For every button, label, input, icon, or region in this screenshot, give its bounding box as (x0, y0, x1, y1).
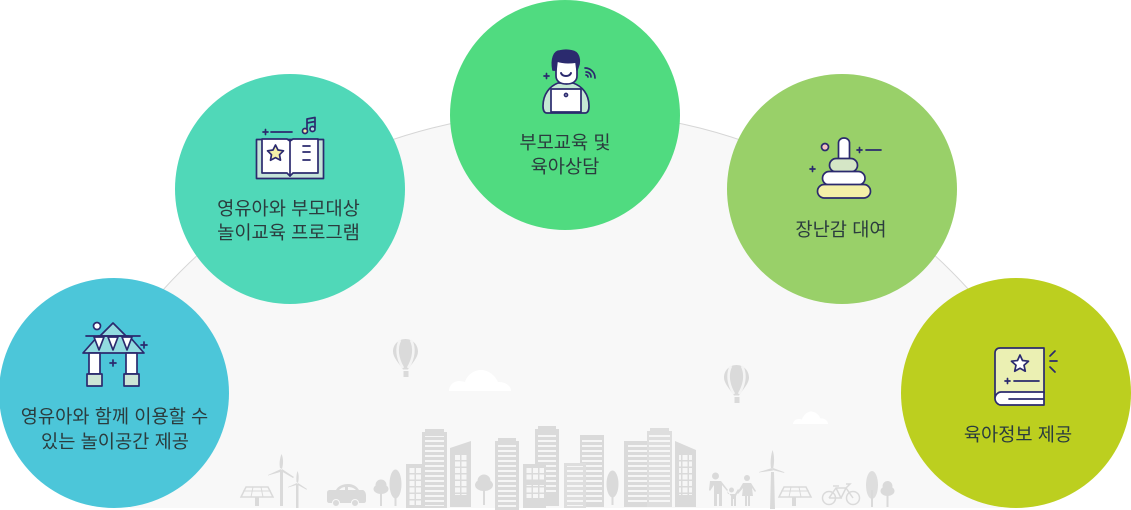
panel: toy rental (727, 74, 957, 304)
icon: gate with bunting (83, 322, 147, 386)
tree middle (475, 474, 493, 505)
label: 놀이교육 프로그램 (217, 222, 360, 243)
bicycle (822, 484, 860, 504)
hot air balloon right (724, 365, 749, 403)
panel: education program (175, 74, 405, 304)
building group four (624, 428, 696, 507)
icon: open book with music note (256, 118, 324, 178)
icon: book with star (995, 348, 1057, 405)
panel: parenting information (901, 278, 1131, 508)
circle background (175, 74, 405, 304)
car (327, 484, 366, 506)
circle background (0, 278, 229, 508)
cloud right (793, 412, 828, 424)
label: 육아정보 제공 (964, 424, 1072, 445)
label: 영유아와 함께 이용할 수 (21, 406, 208, 427)
cloud left (449, 370, 511, 391)
circle background (727, 74, 957, 304)
city skyline illustration (241, 339, 894, 510)
building group two (495, 426, 559, 510)
solar panel left (241, 487, 273, 506)
dome outline (130, 111, 1002, 330)
circle background (901, 278, 1131, 508)
label: 육아상담 (531, 156, 599, 177)
wind turbines left (268, 454, 307, 508)
hot air balloon left (393, 339, 418, 377)
tree oval (606, 470, 618, 505)
building group one (406, 429, 471, 508)
building group three (564, 435, 604, 508)
trees group one (374, 470, 402, 506)
label: 있는 놀이공간 제공 (41, 431, 189, 452)
panel: play space (0, 278, 229, 508)
label: 영유아와 부모대상 (217, 198, 360, 219)
wind turbine right (759, 450, 784, 509)
icon: stacking rings toy (810, 138, 881, 198)
solar panel right (779, 487, 811, 506)
trees group right (866, 471, 894, 507)
label: 부모교육 및 (519, 132, 611, 153)
panel: parent counseling (450, 0, 680, 230)
label: 장난감 대여 (795, 219, 887, 240)
circle background (450, 0, 680, 230)
background dome (130, 111, 1002, 508)
icon: person with laptop (543, 50, 595, 113)
family (709, 472, 756, 506)
